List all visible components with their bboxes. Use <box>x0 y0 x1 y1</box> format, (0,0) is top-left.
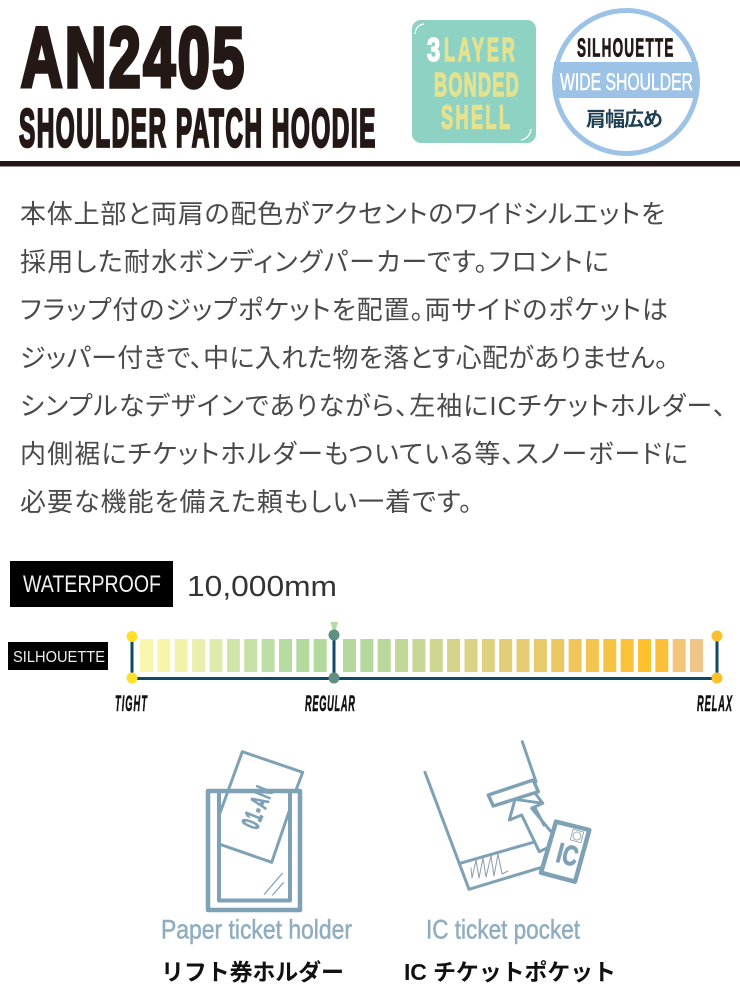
waterproof rating: WATERPROOF <box>23 571 161 598</box>
badge: 3 layer bonded shell <box>412 20 536 143</box>
icon: IC ticket pocket <box>425 742 589 889</box>
badge: 3 layer bonded shell: BONDED <box>434 66 520 103</box>
IC chip symbol <box>570 829 584 843</box>
label: IC ticket pocket <box>404 914 616 985</box>
description text: シンプルなデザインでありながら、左袖にICチケットホルダー、 <box>20 391 726 421</box>
model number: AN2405 <box>21 12 247 105</box>
label: IC ticket pocket: IC チケットポケット <box>404 959 616 985</box>
scale labels <box>115 691 733 716</box>
description text: フラップ付のジップポケットを配置。両サイドのポケットは <box>20 295 668 325</box>
icon: paper ticket holder <box>208 752 303 910</box>
ticket number: 01-AN <box>238 782 279 833</box>
description text: 内側裾にチケットホルダーもついている等、スノーボードに <box>20 439 688 469</box>
elastic zigzag <box>471 854 508 878</box>
scale labels: REGULAR <box>305 691 356 716</box>
badge: 3 layer bonded shell: SHELL <box>441 99 512 136</box>
ticket card <box>219 752 303 862</box>
badge: silhouette wide shoulder <box>554 10 698 154</box>
IC card <box>541 822 589 882</box>
label: IC ticket pocket: IC ticket pocket <box>426 914 580 944</box>
waterproof rating <box>10 561 337 607</box>
label: paper ticket holder <box>161 914 352 985</box>
badge: silhouette wide shoulder: SILHOUETTE <box>577 34 675 63</box>
badge: 3 layer bonded shell: 3 <box>427 32 440 69</box>
glass highlight <box>264 873 283 895</box>
scale label: SILHOUETTE <box>13 649 105 666</box>
scale labels: RELAX <box>697 691 733 716</box>
waterproof rating: 10,000mm <box>187 571 337 603</box>
IC text: IC <box>553 838 581 873</box>
silhouette scale <box>8 622 733 716</box>
description text: 採用した耐水ボンディングパーカーです。フロントに <box>20 247 609 277</box>
description text: 必要な機能を備えた頼もしい一着です。 <box>20 487 472 517</box>
scale axis <box>132 635 717 678</box>
badge: 3 layer bonded shell: LAYER <box>444 31 518 68</box>
arrow <box>509 799 551 852</box>
description text <box>20 199 726 517</box>
title <box>19 12 377 158</box>
holder frame <box>208 791 300 910</box>
label: paper ticket holder: リフト券ホルダー <box>161 959 344 985</box>
product name: SHOULDER PATCH HOODIE <box>19 97 377 158</box>
scale label <box>8 642 108 670</box>
description text: 本体上部と両肩の配色がアクセントのワイドシルエットを <box>20 199 665 229</box>
marker: relax <box>712 630 722 684</box>
label: paper ticket holder: Paper ticket holder <box>161 914 352 944</box>
pocket flap <box>488 780 538 806</box>
description text: ジッパー付きで、中に入れた物を落とす心配がありません。 <box>20 343 668 373</box>
badge: silhouette wide shoulder: 肩幅広め <box>586 108 663 131</box>
marker: regular, current position <box>328 622 340 684</box>
header divider <box>0 161 740 166</box>
sleeve outline <box>425 742 544 889</box>
colour gradient segments <box>140 639 703 672</box>
scale labels: TIGHT <box>115 691 148 716</box>
marker: tight <box>126 631 138 684</box>
